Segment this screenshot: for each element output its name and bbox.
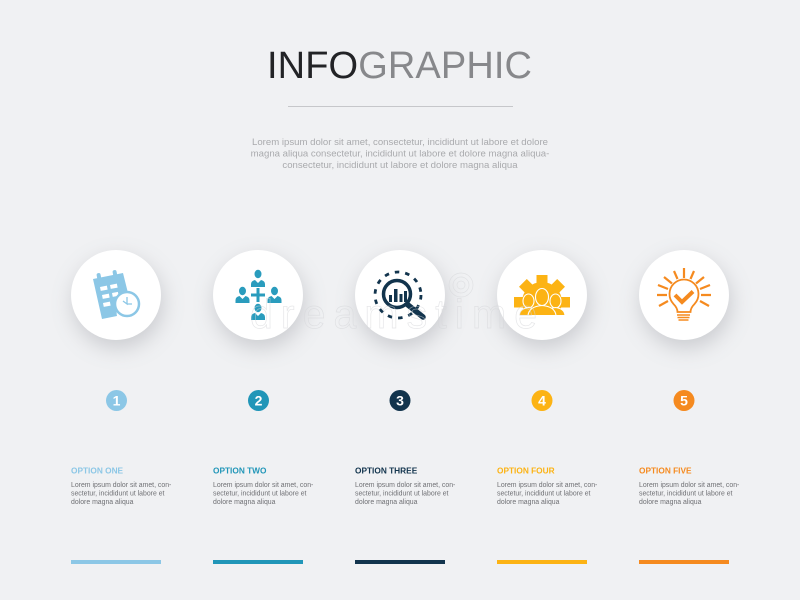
heading and text: option three: OPTION THREE bbox=[355, 466, 418, 476]
bar bbox=[71, 560, 161, 564]
heading and text: option five: sectetur, incididunt ut labore et bbox=[639, 490, 733, 498]
heading and text: option two: Lorem ipsum dolor sit amet, con- bbox=[213, 482, 313, 489]
heading and text: option three: dolore magna aliqua bbox=[355, 499, 418, 506]
panel: option five bbox=[639, 250, 739, 564]
heading and text: option four: sectetur, incididunt ut labore et bbox=[497, 490, 591, 498]
infographic canvas bbox=[66, 52, 739, 564]
intro text: magna aliqua consectetur, incididunt ut labore et dolore magna aliqua- bbox=[251, 148, 549, 160]
intro text: consectetur, incididunt ut labore et dolore magna aliqua bbox=[282, 160, 518, 171]
heading and text: option five: OPTION FIVE bbox=[639, 466, 692, 476]
icon circle: four bbox=[497, 250, 589, 348]
number badge 5: 5 bbox=[680, 392, 688, 408]
icon: people with plus bbox=[236, 270, 282, 320]
bar bbox=[213, 560, 303, 564]
panel: option one bbox=[71, 250, 171, 564]
number badge 3: 3 bbox=[396, 392, 404, 408]
heading and text: option three: sectetur, incididunt ut labore et bbox=[355, 490, 449, 498]
icon circle: two bbox=[213, 250, 305, 348]
panel: option two bbox=[213, 250, 313, 564]
watermark: dreamstime bbox=[250, 291, 537, 337]
number badge 3 bbox=[390, 390, 410, 411]
heading and text: option four: dolore magna aliqua bbox=[497, 499, 560, 506]
icon: light bulb with check bbox=[657, 268, 711, 320]
icon: magnifier with chart bbox=[375, 272, 423, 318]
heading and text: option four: Lorem ipsum dolor sit amet, con- bbox=[497, 482, 597, 489]
icon: calendar and clock bbox=[93, 270, 139, 319]
heading and text: option five: Lorem ipsum dolor sit amet, con- bbox=[639, 482, 739, 489]
heading and text: option four bbox=[497, 466, 597, 506]
heading and text: option one: sectetur, incididunt ut labore et bbox=[71, 490, 165, 498]
intro text: Lorem ipsum dolor sit amet, consectetur, incididunt ut labore et dolore bbox=[252, 137, 548, 148]
icon circle: one bbox=[71, 250, 163, 348]
panel: option three bbox=[355, 250, 455, 564]
heading and text: option five bbox=[639, 466, 739, 506]
heading and text: option two: sectetur, incididunt ut labore et bbox=[213, 490, 307, 498]
number badge 2 bbox=[248, 390, 269, 411]
title: INFOGRAPHIC bbox=[267, 45, 532, 87]
heading and text: option four: OPTION FOUR bbox=[497, 466, 555, 476]
bar bbox=[355, 560, 445, 564]
bar bbox=[639, 560, 729, 564]
number badge 5 bbox=[674, 390, 694, 411]
heading and text: option one: OPTION ONE bbox=[71, 466, 124, 476]
bar bbox=[497, 560, 587, 564]
icon circle: three bbox=[355, 250, 447, 348]
heading and text: option five: dolore magna aliqua bbox=[639, 499, 702, 506]
heading and text: option one bbox=[71, 466, 171, 506]
heading and text: option two: OPTION TWO bbox=[213, 466, 267, 476]
panel: option four bbox=[497, 250, 597, 564]
heading and text: option three bbox=[355, 466, 455, 506]
number badge 4 bbox=[532, 390, 552, 411]
number badge 2: 2 bbox=[255, 392, 263, 408]
heading and text: option one: dolore magna aliqua bbox=[71, 499, 134, 506]
number badge 1 bbox=[106, 390, 127, 411]
number badge 1: 1 bbox=[113, 392, 121, 408]
icon: gear with team bbox=[514, 275, 570, 315]
number badge 4: 4 bbox=[538, 392, 546, 408]
icon circle: five bbox=[639, 250, 731, 348]
heading and text: option three: Lorem ipsum dolor sit amet, con- bbox=[355, 482, 455, 489]
heading and text: option two: dolore magna aliqua bbox=[213, 499, 276, 506]
heading and text: option two bbox=[213, 466, 313, 506]
intro text bbox=[251, 137, 549, 171]
heading and text: option one: Lorem ipsum dolor sit amet, con- bbox=[71, 482, 171, 489]
